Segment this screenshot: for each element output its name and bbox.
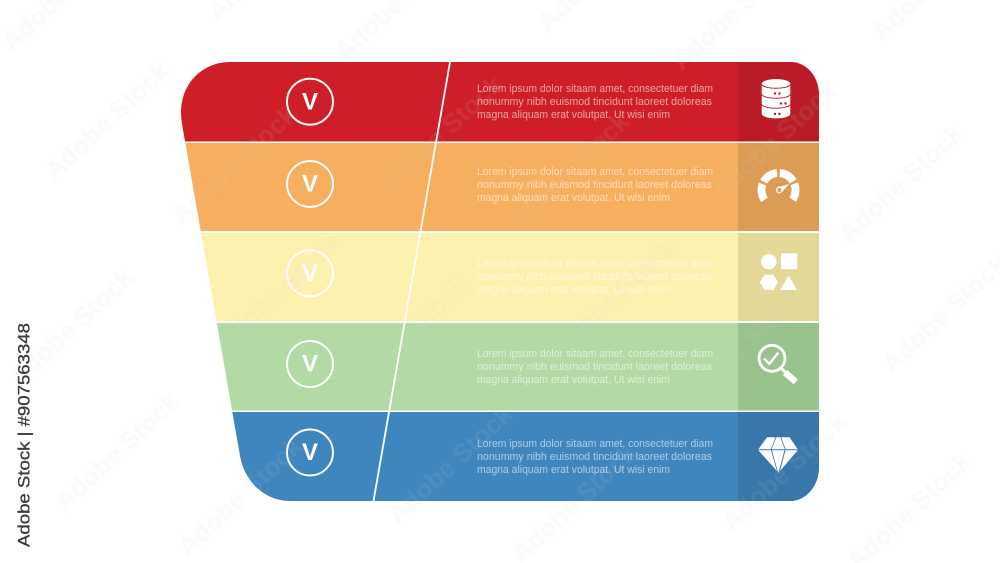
stock id label: Adobe Stock | #907563348 (14, 323, 34, 547)
watermark pattern: Adobe Stock (706, 75, 843, 206)
text block row 4: nonummy nibh euismod tincidunt laoreet doloreas (477, 361, 712, 373)
text block row 1: nonummy nibh euismod tincidunt laoreet doloreas (477, 96, 712, 108)
text block row 2: magna aliquam erat volutpat. Ut wisi enim (477, 192, 670, 204)
text block row 4 (477, 348, 713, 386)
text block row 5 (477, 438, 713, 476)
row 1 band: red (170, 62, 830, 142)
text block row 4: magna aliquam erat volutpat. Ut wisi enim (477, 374, 670, 386)
watermark pattern: Adobe Stock (716, 406, 853, 537)
row 4 band: green (216, 323, 738, 410)
badge row 1 (287, 79, 333, 125)
icon: magnifier with check (759, 345, 796, 382)
text block row 2 (477, 166, 713, 204)
row 5 band: blue (232, 412, 819, 501)
icon column shade: yellow (738, 233, 820, 321)
badge row 2: V (302, 171, 318, 198)
watermark pattern: Adobe Stock (49, 386, 186, 517)
watermark pattern: Adobe Stock (39, 55, 176, 186)
watermark pattern: Adobe Stock (166, 99, 303, 230)
icon column shade: blue (738, 412, 820, 502)
watermark pattern: Adobe Stock (499, 106, 636, 237)
badge row 5: V (302, 439, 318, 466)
badge row 3: V (302, 260, 318, 287)
icon: diamond (758, 437, 798, 473)
watermark pattern: Adobe Stock (382, 399, 519, 530)
text block row 4: Lorem ipsum dolor sitaam amet, consectetuer diam (477, 348, 713, 360)
icon: database (762, 79, 790, 118)
text block row 3 (477, 258, 713, 296)
text block row 5: nonummy nibh euismod tincidunt laoreet doloreas (477, 451, 712, 463)
text block row 3: magna aliquam erat volutpat. Ut wisi enim (477, 284, 670, 296)
watermark pattern: Adobe Stock (338, 269, 475, 400)
icon column shade: red (738, 62, 820, 142)
funnel table (170, 62, 830, 502)
watermark pattern: Adobe Stock (672, 282, 809, 413)
text block row 3: nonummy nibh euismod tincidunt laoreet doloreas (477, 271, 712, 283)
text block row 5: magna aliquam erat volutpat. Ut wisi enim (477, 464, 670, 476)
watermark pattern: Adobe Stock (210, 227, 347, 358)
badge row 5 (287, 430, 333, 476)
watermark pattern: Adobe Stock (545, 232, 682, 363)
text block row 5: Lorem ipsum dolor sitaam amet, consectetuer diam (477, 438, 713, 450)
diagonal divider line (374, 62, 450, 501)
watermark pattern: Adobe Stock (3, 262, 140, 393)
text block row 3: Lorem ipsum dolor sitaam amet, consectetuer diam (477, 258, 713, 270)
icon column shade: orange (738, 143, 820, 231)
row 3 band: yellow (201, 233, 738, 321)
badge row 3 (287, 250, 333, 296)
text block row 1: magna aliquam erat volutpat. Ut wisi enim (477, 109, 670, 121)
text block row 1 (477, 83, 713, 121)
text block row 2: Lorem ipsum dolor sitaam amet, consectetuer diam (477, 166, 713, 178)
infographic canvas (17, 62, 819, 548)
badge row 2 (287, 161, 333, 207)
icon: geometric shapes (760, 253, 797, 290)
badge row 4: V (302, 351, 318, 378)
badge row 4 (287, 341, 333, 387)
watermark pattern: Adobe Stock (172, 431, 309, 562)
icon: speedometer gauge (755, 166, 802, 214)
watermark pattern: Adobe Stock (372, 69, 509, 200)
text block row 1: Lorem ipsum dolor sitaam amet, consectetuer diam (477, 83, 713, 95)
watermark pattern: Adobe Stock (833, 118, 970, 249)
icon column shade: green (738, 323, 820, 410)
row 2 band: orange (185, 143, 738, 231)
badge row 1: V (302, 88, 318, 115)
text block row 2: nonummy nibh euismod tincidunt laoreet doloreas (477, 179, 712, 191)
